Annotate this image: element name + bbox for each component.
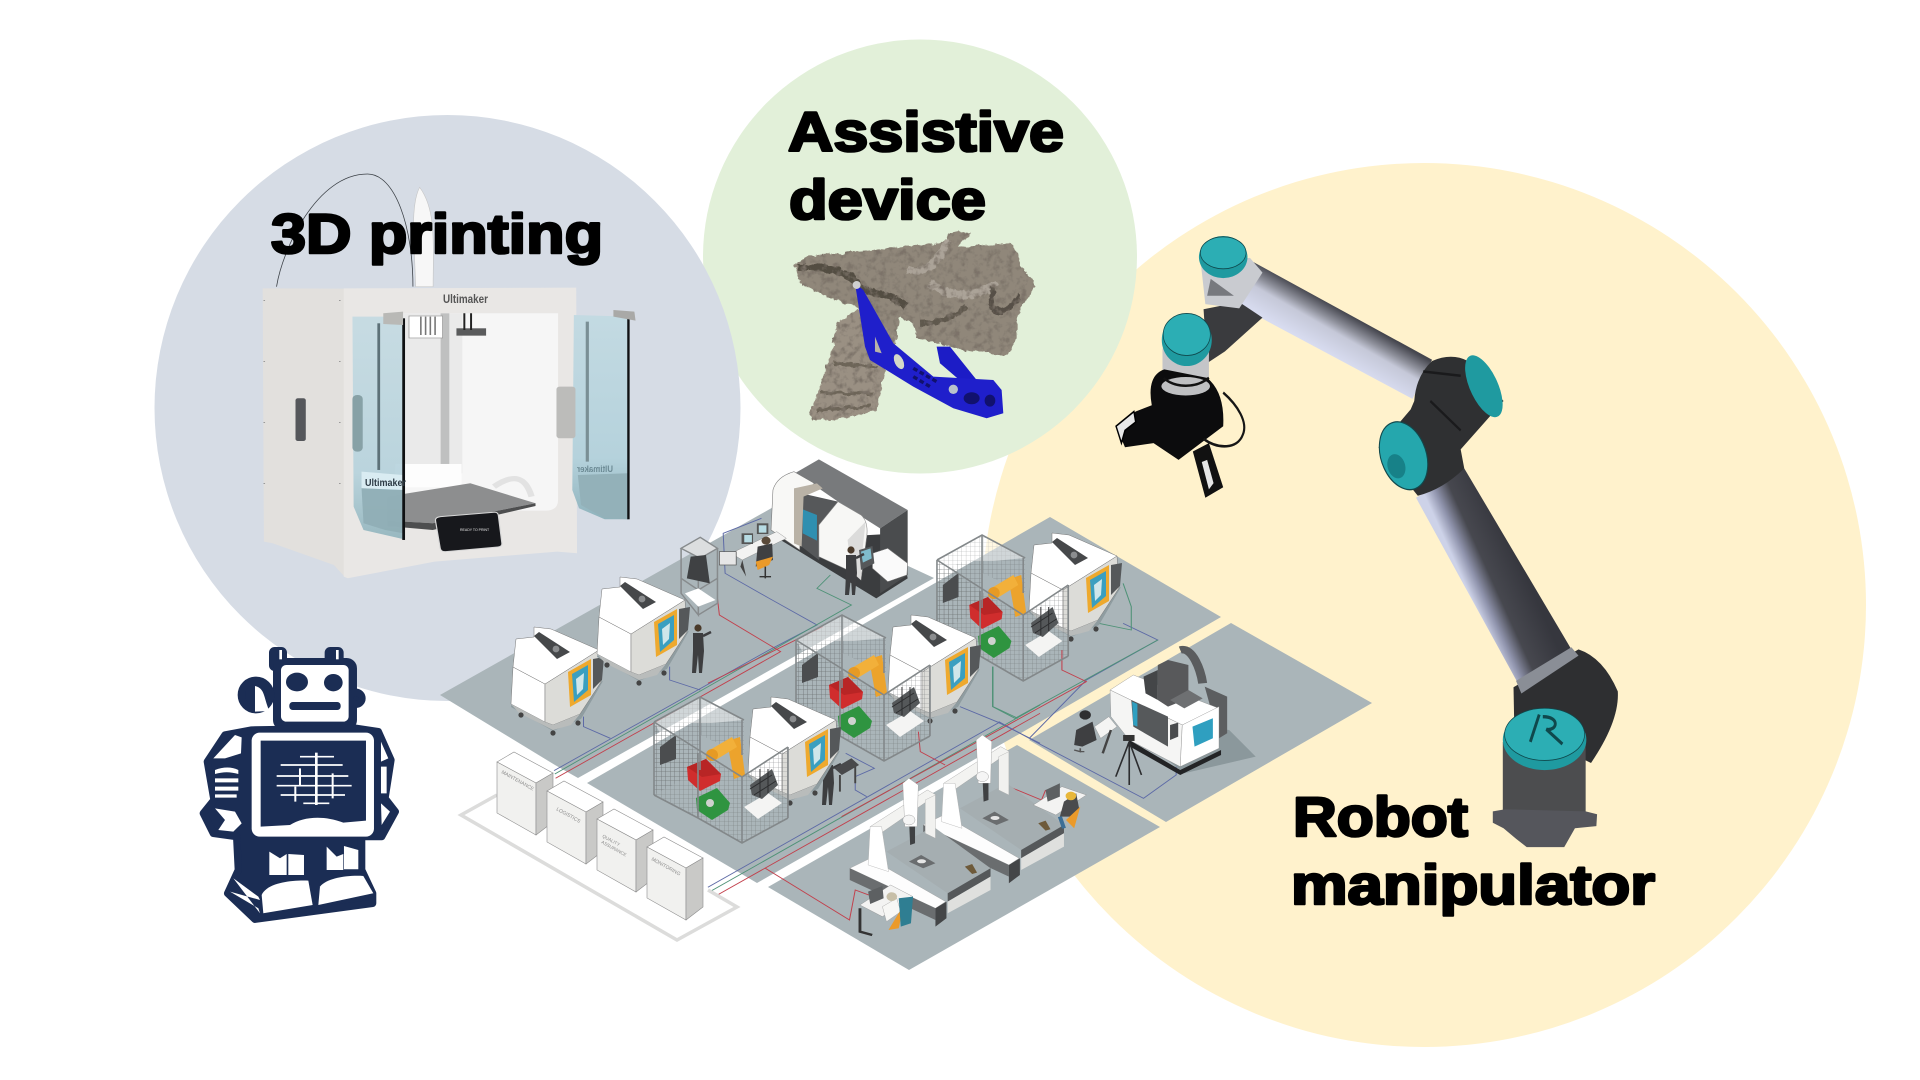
3D printer illustration: Ultimaker — [443, 294, 488, 306]
heading: Assistive device: Assistive — [788, 100, 1064, 163]
feet — [230, 876, 373, 913]
tripod — [1116, 742, 1141, 785]
arm details — [213, 735, 390, 832]
laptop cart — [834, 758, 859, 792]
circle: assistive device — [703, 40, 1137, 474]
chest circuit lines — [277, 753, 352, 805]
gripper body — [1116, 369, 1223, 460]
mounting foot — [1493, 809, 1597, 847]
heading: Robot manipulator: manipulator — [1291, 853, 1655, 916]
operators and desks — [692, 523, 864, 805]
shoulder joint — [1514, 649, 1618, 763]
CNC machine 2 — [597, 577, 690, 686]
heading: Robot manipulator: Robot — [1293, 785, 1468, 848]
robot cell 2 — [796, 615, 930, 761]
heading: 3D printing: 3D printing — [271, 202, 603, 265]
antenna highlights — [279, 650, 282, 659]
right door glass — [572, 315, 629, 519]
elbow joint — [1379, 357, 1504, 496]
robot mascot icon — [203, 650, 395, 919]
build plate — [387, 483, 536, 523]
touch screen — [435, 512, 502, 552]
3D printer illustration — [263, 174, 636, 578]
CNC machine 1 — [511, 627, 604, 736]
data cabinets — [497, 752, 703, 920]
CNC machine 3 — [748, 697, 841, 806]
CNC machine 4 — [888, 615, 981, 724]
legs — [269, 846, 358, 875]
robot cells with CNC machines — [654, 533, 1122, 843]
silhouette — [203, 651, 395, 919]
gripper fingers — [1116, 412, 1136, 443]
robot cell 1 — [654, 697, 788, 843]
heading: Assistive device — [788, 100, 1064, 231]
rear inspection desk — [1033, 783, 1086, 828]
3D printer illustration: Ultimaker — [365, 477, 406, 489]
chamber interior — [403, 313, 558, 511]
forearm tube — [1416, 468, 1571, 683]
wrist teal cap — [1162, 314, 1212, 366]
robot cell 3 — [937, 535, 1068, 681]
heading: Assistive device: device — [789, 168, 986, 231]
circle: robot manipulator — [982, 163, 1866, 1047]
cabinet: quality assurance — [597, 809, 653, 892]
logo sticker — [296, 398, 306, 441]
desk with operator — [1095, 717, 1117, 738]
cabinet: maintenance — [497, 752, 553, 835]
operator at machine two — [692, 624, 711, 673]
spool holder — [414, 187, 433, 287]
base cylinder — [1503, 742, 1586, 820]
coordinate measuring machines — [850, 735, 1086, 935]
robot manipulator arm — [1116, 236, 1618, 847]
vertical machining center — [1074, 650, 1256, 785]
CNC machines front row — [511, 577, 690, 736]
side ear detail — [255, 686, 269, 712]
data cabinets: MONITORING — [650, 857, 681, 878]
data cabinets: QUALITY — [602, 834, 621, 847]
door handle — [556, 387, 575, 438]
3D printer illustration: READY TO PRINT — [460, 528, 490, 532]
factory network cables — [554, 518, 1176, 920]
seated operator desk — [719, 523, 786, 578]
cabinet: logistics — [547, 781, 603, 864]
front inspection desk — [860, 885, 913, 935]
heading: Robot manipulator — [1291, 785, 1655, 916]
data cabinets: MAINTENANCE — [500, 770, 535, 793]
CMM front — [850, 778, 991, 927]
circle: 3D printing — [154, 115, 740, 701]
implant — [937, 347, 977, 383]
upper arm tube — [1239, 262, 1432, 399]
gripper cable — [1204, 393, 1244, 446]
chest frame — [252, 733, 374, 837]
large turning machine — [771, 459, 908, 598]
robot face — [281, 665, 349, 722]
skull and spine bone — [793, 232, 1035, 420]
wrist 1 — [1201, 258, 1262, 308]
factory floor plates — [440, 505, 1372, 970]
metrology frame — [681, 537, 717, 615]
skull with blue jaw implant — [793, 232, 1035, 420]
wrist cylinder — [1162, 348, 1209, 390]
base teal cap — [1503, 710, 1586, 770]
CMM rear — [923, 735, 1064, 883]
printer side panel — [263, 288, 345, 577]
operator with laptop — [822, 756, 841, 805]
3D printer illustration: Ultimaker — [577, 464, 613, 475]
left door glass — [352, 317, 404, 539]
cabinet: monitoring — [647, 837, 703, 920]
operator at turning machine — [845, 546, 864, 595]
CNC machine 5 — [1029, 533, 1122, 642]
data cabinets: ASSURANCE — [601, 840, 627, 857]
data cabinets: LOGISTICS — [555, 807, 582, 825]
cabinet base outline — [461, 795, 737, 940]
filament tube — [277, 174, 413, 287]
printer front frame — [344, 288, 577, 578]
wrist link — [1204, 302, 1262, 363]
